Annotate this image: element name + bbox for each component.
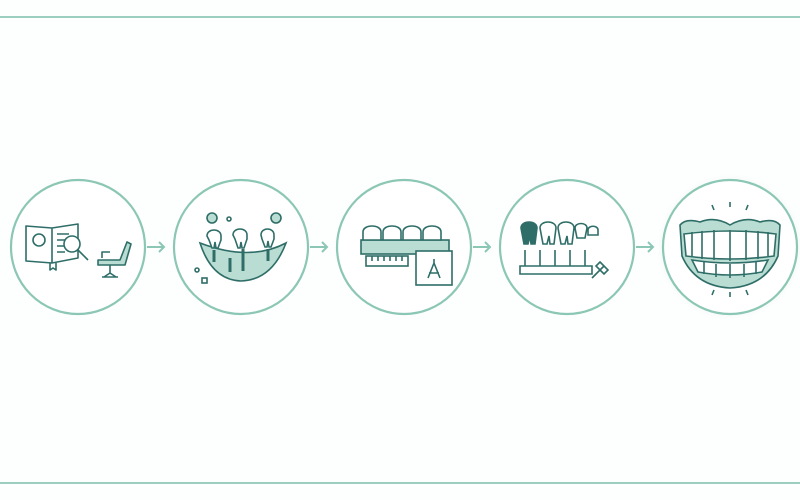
arrow 2 bbox=[310, 242, 327, 252]
arrow 3 bbox=[473, 242, 490, 252]
step 4: fitting bbox=[500, 180, 634, 314]
arrow 1 bbox=[147, 242, 164, 252]
step 5: final smile bbox=[656, 173, 800, 321]
step 3: design bbox=[337, 180, 471, 314]
step 1: consultation bbox=[11, 180, 145, 314]
step 2: implants bbox=[174, 180, 308, 314]
arrow 4 bbox=[636, 242, 653, 252]
